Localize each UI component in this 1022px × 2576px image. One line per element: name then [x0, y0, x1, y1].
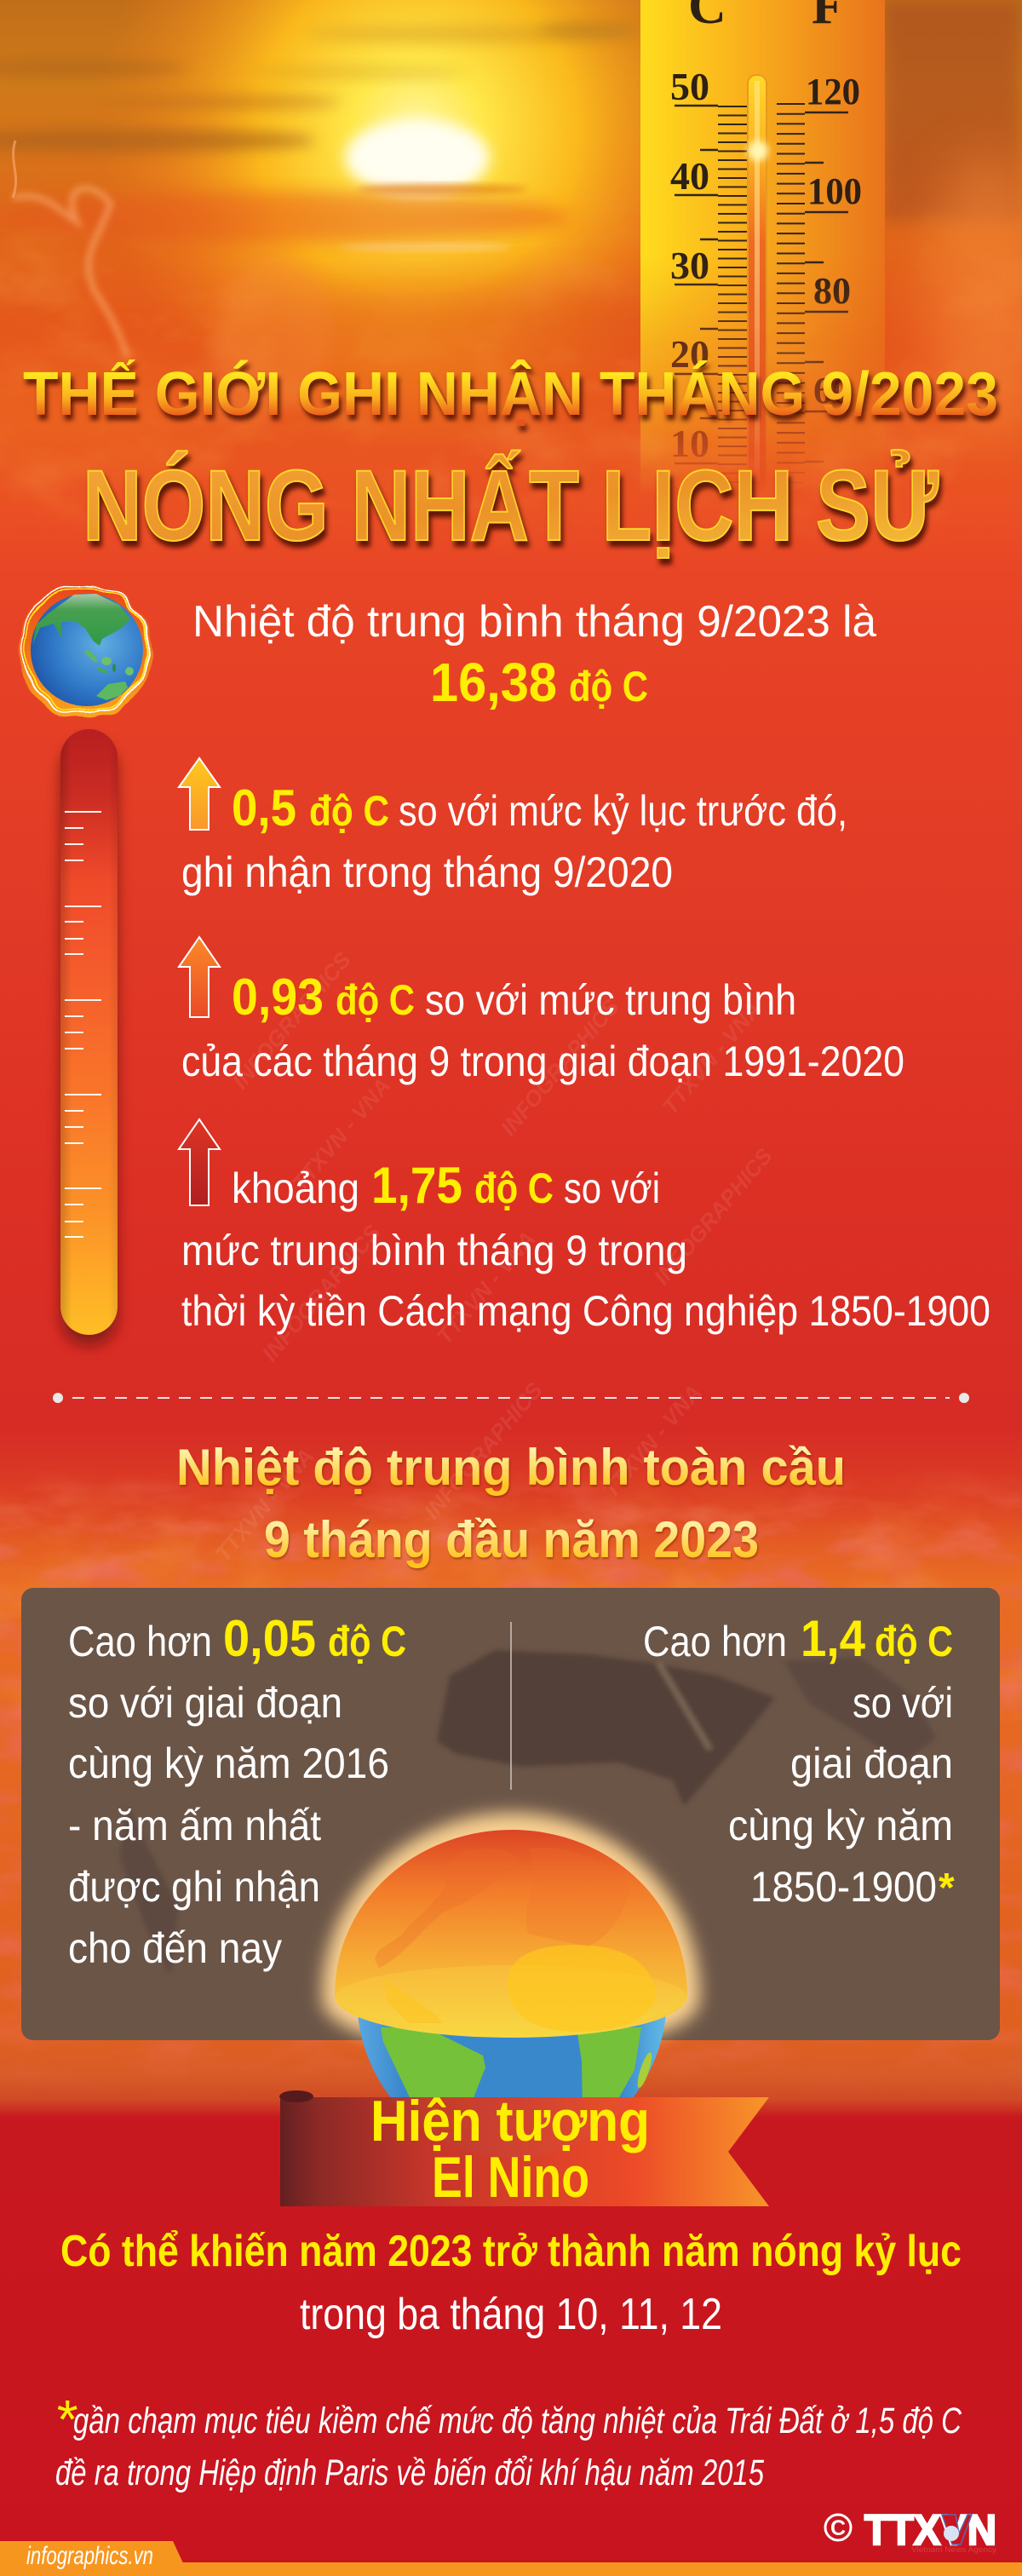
- fact 1: so với mức kỷ lục trước đó,: [399, 787, 847, 835]
- left column text: so với giai đoạn: [68, 1679, 342, 1727]
- fact 1: [181, 779, 847, 896]
- footnote: đề ra trong Hiệp định Paris về biến đổi khí hậu năm 2015: [55, 2452, 765, 2493]
- left column text: 0,05: [223, 1610, 316, 1667]
- heading: global average temperature: [176, 1439, 846, 1568]
- right column text: so với: [853, 1679, 953, 1727]
- text: El Nino effect: trong ba tháng 10, 11, 12: [300, 2290, 722, 2339]
- left column text: độ C: [328, 1618, 406, 1665]
- thermometer photo: 20: [670, 332, 709, 376]
- right column text: 1,4: [801, 1610, 866, 1667]
- left column text: cho đến nay: [68, 1924, 282, 1972]
- footer bar: [0, 2541, 1022, 2576]
- footer bar: infographics.vn: [26, 2542, 153, 2570]
- fact 3: [181, 1157, 990, 1335]
- fact 2: độ C: [336, 976, 415, 1024]
- left column text: - năm ấm nhất: [68, 1802, 321, 1849]
- fact 1: độ C: [309, 787, 389, 835]
- background: fire texture band: [0, 1465, 1022, 2096]
- icon: arrow 1: [179, 758, 220, 830]
- watermarks: TTXVN - VNA: [287, 1073, 396, 1196]
- thermometer photo: 80: [813, 270, 851, 312]
- right column text: độ C: [875, 1618, 953, 1665]
- right column text: 1850-1900: [750, 1863, 937, 1911]
- fact 1: 0,5: [232, 779, 296, 837]
- right column text: cùng kỳ năm: [728, 1802, 953, 1849]
- fact 3: so với: [564, 1164, 660, 1212]
- column divider: [510, 1622, 512, 1790]
- illustration: overheating earth: [322, 1813, 700, 2158]
- watermarks: INFOGRAPHICS: [496, 993, 624, 1141]
- fact 1: ghi nhận trong tháng 9/2020: [181, 848, 673, 896]
- footnote: [55, 2389, 962, 2493]
- heading: global average temperature: 9 tháng đầu năm 2023: [264, 1511, 759, 1568]
- logo: TTXVN: TTXVN: [864, 2506, 996, 2554]
- banner: El Nino: [279, 2089, 769, 2210]
- text: average temperature September 2023: [192, 597, 876, 713]
- right column text: *: [939, 1866, 955, 1911]
- fact 2: [181, 969, 904, 1085]
- fact 2: 0,93: [232, 969, 324, 1026]
- thermometer photo: [640, 0, 885, 494]
- map shape: [119, 1650, 937, 1976]
- logo: TTXVN: C: [830, 2516, 846, 2540]
- watermarks: [210, 946, 778, 1567]
- fact 2: của các tháng 9 trong giai đoạn 1991-2020: [181, 1038, 904, 1085]
- left column text: [68, 1610, 406, 1972]
- banner: El Nino: Hiện tượng: [370, 2089, 650, 2153]
- banner: El Nino: El Nino: [432, 2145, 589, 2210]
- right column text: giai đoạn: [790, 1739, 953, 1787]
- watermarks: TTXVN - VNA: [657, 997, 766, 1119]
- thermometer photo: 120: [806, 71, 860, 112]
- thermometer photo: 10: [670, 422, 709, 465]
- icon: arrow 3: [179, 1119, 220, 1205]
- thermometer photo: 100: [807, 170, 862, 212]
- right column text: Cao hơn: [643, 1618, 787, 1665]
- background: sunset sky: [0, 0, 1022, 562]
- thermometer photo: 50: [670, 65, 709, 108]
- icon: earth badge: [18, 584, 152, 719]
- watermarks: INFOGRAPHICS: [227, 946, 356, 1094]
- thermometer photo: 40: [670, 154, 709, 198]
- left column text: Cao hơn: [68, 1618, 212, 1665]
- watermarks: INFOGRAPHICS: [257, 1219, 386, 1366]
- footnote: *: [55, 2389, 78, 2450]
- dashed divider: [53, 1393, 969, 1403]
- right column text: [643, 1610, 955, 1911]
- left column text: được ghi nhận: [68, 1863, 320, 1911]
- decorative thermometer bar: [60, 729, 118, 1346]
- fact 3: mức trung bình tháng 9 trong: [181, 1227, 687, 1274]
- text: average temperature September 2023: Nhiệt độ trung bình tháng 9/2023 là: [192, 597, 876, 647]
- logo: TTXVN: Vietnam News Agency: [911, 2545, 997, 2554]
- watermarks: TTXVN - VNA: [432, 1227, 541, 1349]
- text: El Nino effect: [60, 2227, 962, 2339]
- thermometer photo: 60: [813, 370, 851, 411]
- watermarks: INFOGRAPHICS: [649, 1142, 778, 1290]
- fact 3: khoảng: [232, 1164, 359, 1212]
- heading: global average temperature: Nhiệt độ trung bình toàn cầu: [176, 1439, 846, 1496]
- fact 3: 1,75: [371, 1157, 462, 1214]
- fact 3: độ C: [474, 1164, 554, 1212]
- panel: comparison: [21, 1588, 1000, 2040]
- text: average temperature September 2023: 16,38: [430, 652, 557, 713]
- watermarks: TTXVN - VNA: [210, 1444, 319, 1567]
- watermarks: TTXVN - VNA: [598, 1380, 707, 1503]
- icon: arrow 2: [179, 937, 220, 1017]
- left column text: cùng kỳ năm 2016: [68, 1739, 389, 1787]
- watermarks: INFOGRAPHICS: [419, 1377, 548, 1524]
- thermometer photo: 30: [670, 244, 709, 287]
- fact 2: so với mức trung bình: [425, 976, 796, 1024]
- text: average temperature September 2023: độ C: [569, 663, 648, 710]
